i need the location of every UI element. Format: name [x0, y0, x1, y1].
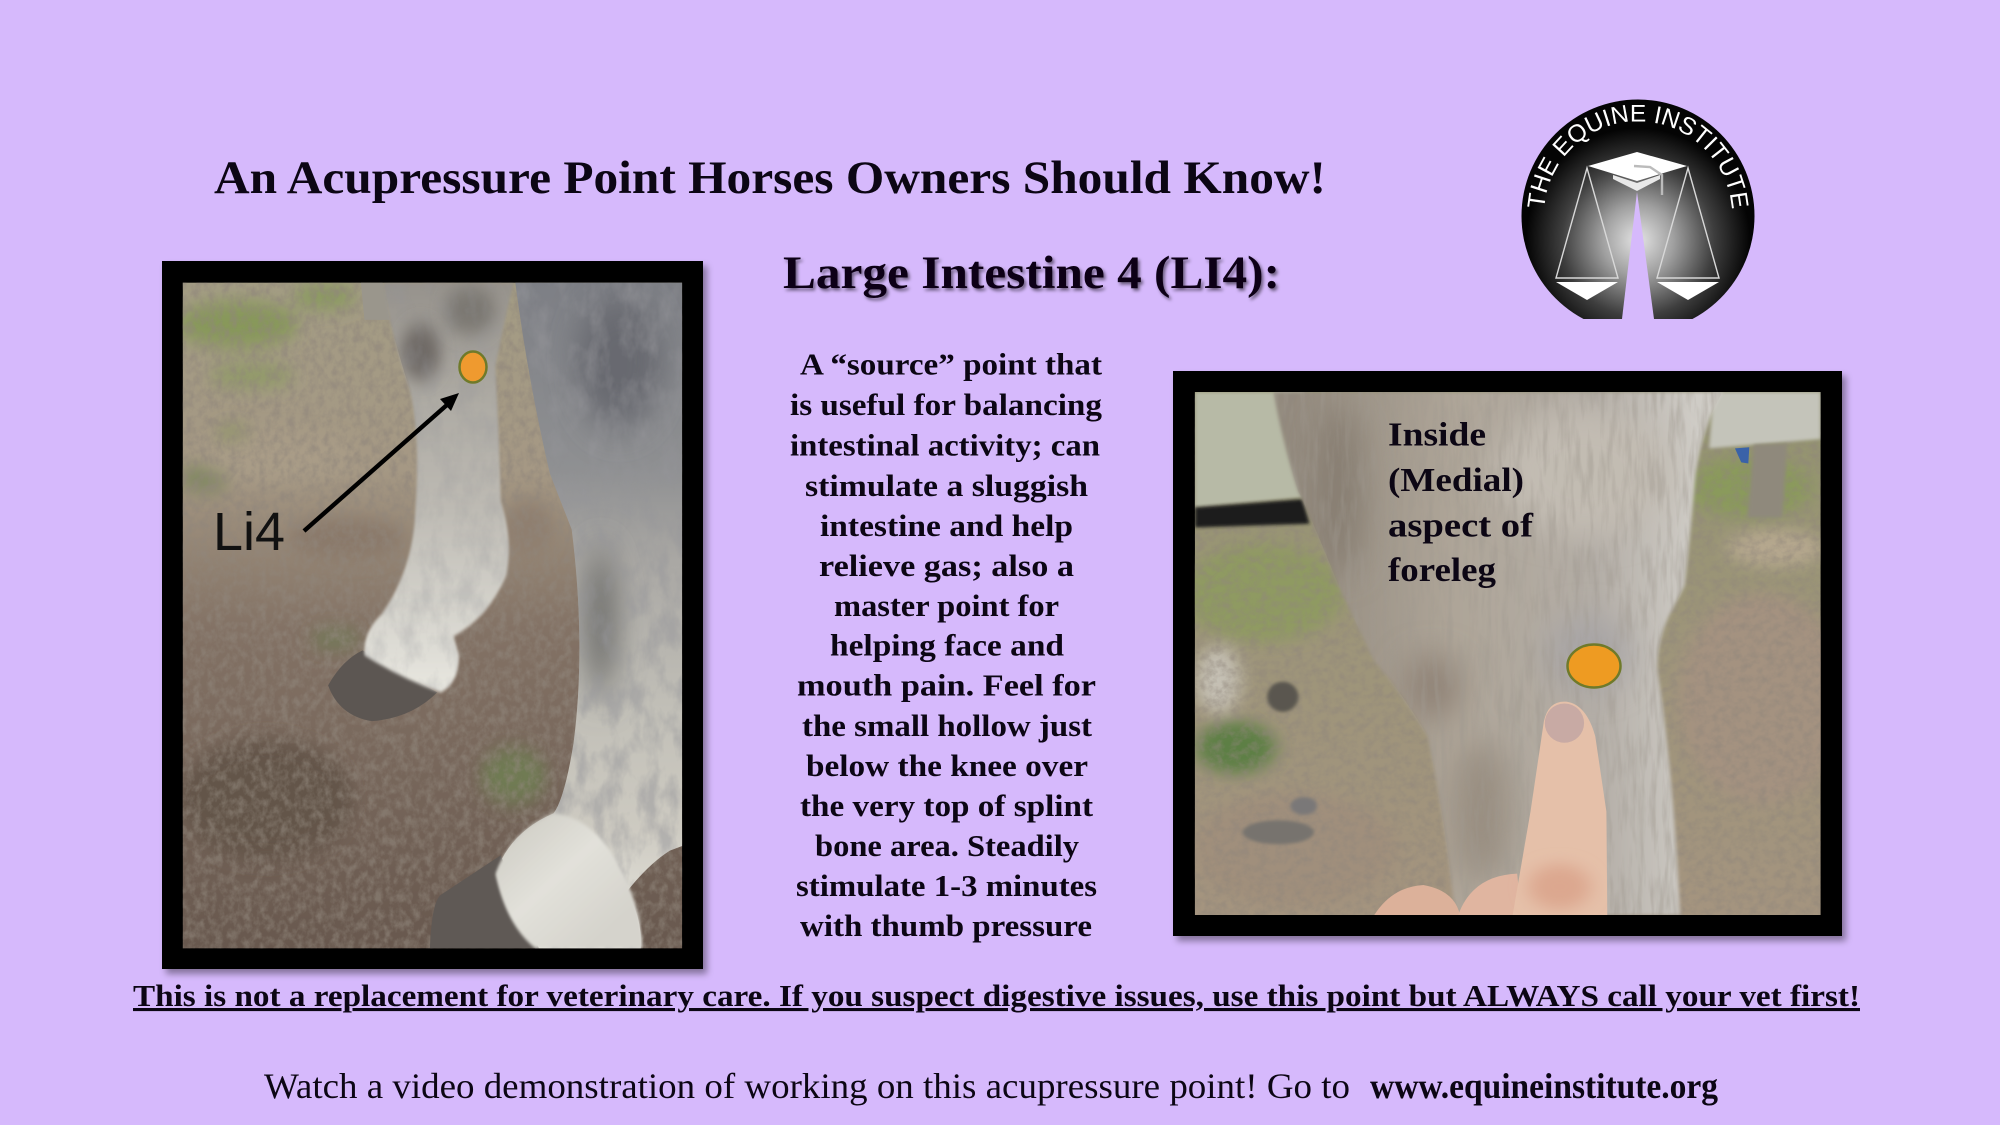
left photo frame [162, 261, 703, 969]
text block: point description: below the knee over [806, 748, 1088, 783]
text block: point description: intestinal activity; can [790, 428, 1100, 462]
heading: Large Intestine 4: Large Intestine 4 (LI4): [783, 247, 1280, 299]
photo caption: inside aspect: Inside [1388, 416, 1486, 454]
text block: point description: bone area. Steadily [815, 828, 1080, 863]
photo caption: inside aspect [1388, 416, 1534, 589]
logo centre column [1622, 192, 1654, 319]
title: An Acupressure Point Horses Owners Should Know! [214, 152, 1326, 204]
logo: The Equine Institute [1522, 100, 1754, 319]
right photo frame [1173, 371, 1842, 936]
text block: point description [790, 346, 1103, 943]
right photo image [1182, 392, 1847, 915]
text block: point description: A “source” point that [800, 346, 1103, 382]
logo disc [1522, 100, 1754, 332]
Li4 label: Li4 [213, 502, 285, 562]
text block: point description: helping face and [830, 628, 1064, 662]
infographic canvas [133, 100, 1860, 1106]
logo curved name: THE EQUINE INSTITUTE [1527, 105, 1749, 208]
text block: point description: stimulate 1-3 minutes [796, 868, 1097, 903]
logo graduation cap [1588, 152, 1687, 195]
text block: point description: the very top of splint [800, 788, 1094, 823]
text block: point description: stimulate a sluggish [805, 468, 1088, 503]
logo scale pans [1556, 168, 1719, 300]
text block: point description: master point for [834, 588, 1059, 623]
text block: point description: mouth pain. Feel for [797, 668, 1096, 702]
disclaimer: This is not a replacement for veterinary care. If you suspect digestive issues, use this point but ALWAYS call your vet first! [133, 978, 1860, 1013]
arrow to Li4 point [304, 393, 459, 531]
text block: point description: the small hollow just [802, 708, 1093, 743]
footer call to action: www.equineinstitute.org [1370, 1066, 1718, 1106]
text block: point description: with thumb pressure [800, 908, 1092, 943]
left photo image [175, 283, 682, 948]
panel: right photo inside foreleg [1173, 371, 1847, 936]
text block: point description: relieve gas; also a [819, 548, 1075, 583]
panel: left photo outer foreleg [162, 261, 703, 969]
photo caption: inside aspect: (Medial) [1388, 462, 1524, 499]
photo caption: inside aspect: foreleg [1388, 552, 1496, 589]
footer call to action: Watch a video demonstration of working on this acupressure point! Go to [264, 1066, 1350, 1106]
Li4 point marker [460, 352, 486, 382]
photo caption: inside aspect: aspect of [1388, 508, 1534, 544]
text block: point description: intestine and help [820, 508, 1073, 543]
LI4 point marker [1568, 644, 1620, 688]
text block: point description: is useful for balancing [790, 387, 1103, 422]
